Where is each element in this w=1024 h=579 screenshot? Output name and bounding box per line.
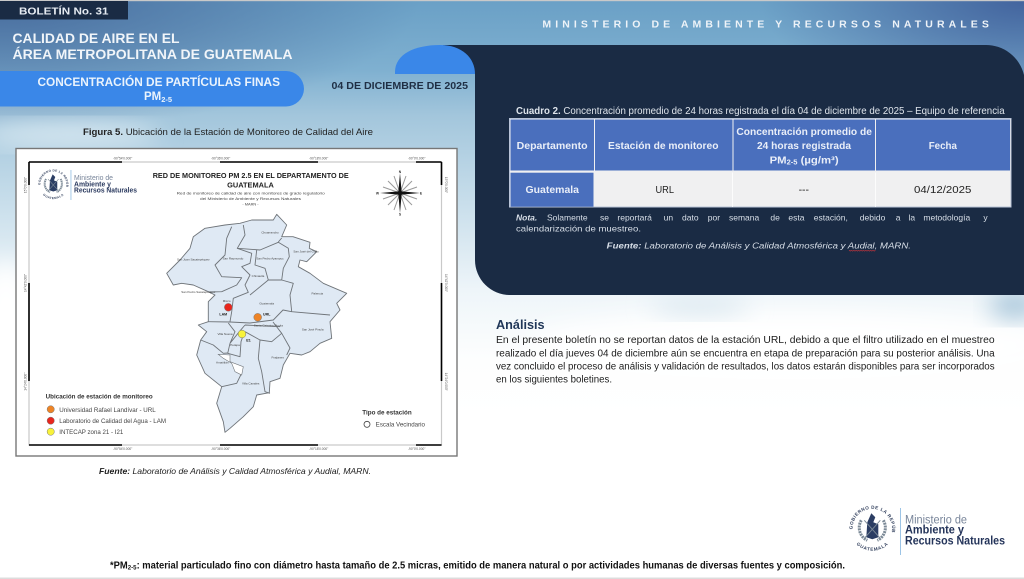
map graticule labels <box>24 156 448 451</box>
map graticule labels: 15°0'0.000" <box>444 177 448 193</box>
table note: dato <box>682 212 699 222</box>
footnote: *PM <box>110 560 129 572</box>
table source: Fuente: Laboratorio de Análisis y Calidad Atmosférica y Audial, MARN. <box>607 240 911 250</box>
map of the department of Guatemala: Guatemala <box>259 301 274 305</box>
map graticule labels: -90°36'0.000" <box>211 447 230 451</box>
map graticule labels: -90°0'0.000" <box>408 447 425 451</box>
icon: compass rose: E <box>420 191 423 195</box>
map of the department of Guatemala: San Juan Sacatepéquez <box>177 257 210 261</box>
analysis text block: en los siguientes boletines. <box>496 374 612 385</box>
table note: a <box>896 212 901 222</box>
table data row: --- <box>799 184 809 196</box>
station marker: I21: I21 <box>246 338 251 342</box>
analysis text block: En el presente boletín no se reportan datos de la estación URL, debido a que el filtro utilizado en el muestreo <box>496 335 995 346</box>
decorative blue dome <box>395 45 475 74</box>
table caption: Cuadro 2. Concentración promedio de 24 horas registrada el día 04 de diciembre de 2025 – Equipo de referencia <box>516 106 1005 117</box>
footnote: : material particulado fino con diámetro hasta tamaño de 2.5 micras, emitido de manera natural o por actividades humanas de diversas fuentes y composición. <box>137 560 845 572</box>
lake Amatitlán <box>218 354 243 375</box>
table note: Solamente <box>547 212 588 222</box>
table header row: Departamento <box>517 140 588 152</box>
legend: station location: Ubicación de estación de monitoreo <box>46 394 153 401</box>
map of the department of Guatemala: Palencia <box>312 291 323 295</box>
legend: station type: Tipo de estación <box>362 409 412 416</box>
map of the department of Guatemala: San Pedro Ayampuc <box>256 256 284 260</box>
icon: ministry logo: Ambiente y <box>905 524 965 536</box>
map title: del Ministerio de Ambiente y Recursos Naturales <box>200 196 301 201</box>
map graticule labels: 14°42'0.000" <box>444 274 448 292</box>
bulletin number tag: BOLETÍN No. 31 <box>19 4 109 18</box>
table note: calendarización de muestreo. <box>516 224 641 234</box>
map graticule labels: -90°54'0.000" <box>113 447 132 451</box>
date: 04 DE DICIEMBRE DE 2025 <box>332 80 468 92</box>
legend: station location: INTECAP zona 21 - I21 <box>59 430 124 436</box>
station marker: URL <box>254 313 271 321</box>
map of the department of Guatemala: Chinautla <box>252 274 265 278</box>
map of the department of Guatemala: San Pedro Sacatepéquez <box>181 290 216 294</box>
footnote: 2-5 <box>128 564 137 572</box>
title: ÁREA METROPOLITANA DE GUATEMALA <box>12 47 293 62</box>
map of the department of Guatemala: Chuarrancho <box>261 230 279 234</box>
legend: station location: Laboratorio de Calidad del Agua - LAM <box>59 419 166 425</box>
icon: ministry logo: Recursos Naturales <box>905 535 1005 547</box>
icon: compass rose: W <box>376 191 380 195</box>
subtitle pill: PM <box>144 91 161 103</box>
map graticule labels: 15°0'0.000" <box>24 177 28 193</box>
analysis text block: realizado el día jueves 04 de diciembre aún se encuentra en etapa de preparación para su posterior análisis. Una <box>496 348 995 359</box>
title: CALIDAD DE AIRE EN EL <box>12 31 180 46</box>
panel: map figure <box>15 148 458 457</box>
icon: compass rose: N <box>399 170 402 174</box>
bulletin number tag <box>0 1 128 20</box>
icon: compass rose <box>376 170 423 216</box>
analysis heading: Análisis <box>496 318 545 332</box>
station marker: LAM <box>219 303 232 316</box>
icon: ministry logo: GUATEMALA <box>857 542 888 551</box>
table data row: Guatemala <box>526 184 579 196</box>
table header row: PM <box>770 154 785 166</box>
panel: navy table panel <box>443 45 1024 295</box>
map of the department of Guatemala: Petapa <box>230 343 240 347</box>
table note: un <box>664 212 673 222</box>
icon: ministry logo <box>849 506 1005 555</box>
map of the department of Guatemala: Mixco <box>223 299 231 303</box>
map of the department of Guatemala <box>167 214 347 432</box>
map graticule labels: -90°36'0.000" <box>211 156 230 160</box>
map graticule labels: 14°42'0.000" <box>24 274 28 292</box>
icon: ministry logo: Ministerio de <box>905 514 967 526</box>
title <box>12 31 293 62</box>
station marker: I21 <box>238 330 251 342</box>
ministry header: MINISTERIO DE AMBIENTE Y RECURSOS NATURALES <box>542 18 989 30</box>
table header row: Concentración promedio de <box>736 126 872 138</box>
icon: map ministry logo: GUATEMALA <box>43 194 64 200</box>
table header row: 2-5 <box>787 160 798 166</box>
table note: reportará <box>617 212 652 222</box>
map source: Fuente: Laboratorio de Análisis y Calidad Atmosférica y Audial, MARN. <box>99 466 371 476</box>
subtitle pill <box>0 71 304 106</box>
icon: map ministry logo: Ambiente y <box>74 182 111 188</box>
table: PM2.5 concentration <box>510 118 1011 207</box>
figure caption: Figura 5. Ubicación de la Estación de Monitoreo de Calidad del Aire <box>83 127 373 138</box>
table note: Nota. <box>516 212 537 222</box>
icon: map ministry logo: Recursos Naturales <box>74 188 137 195</box>
map graticule labels: 14°24'0.000" <box>24 373 28 391</box>
table note: la <box>908 212 915 222</box>
subtitle pill: 2-5 <box>161 95 172 104</box>
table note: por <box>708 212 720 222</box>
map of the department of Guatemala: Fraijanes <box>272 355 284 359</box>
table note: debido <box>860 212 886 222</box>
table data row: URL <box>656 184 674 196</box>
analysis text block <box>496 335 995 385</box>
table note: estación, <box>814 212 848 222</box>
table header row: Estación de monitoreo <box>608 140 718 152</box>
map graticule labels: -90°0'0.000" <box>408 156 425 160</box>
icon: ministry logo: GOBIERNO DE LA REPÚBLICA <box>849 506 896 532</box>
table header row: (µg/m³) <box>797 154 839 166</box>
table header row: 24 horas registrada <box>757 140 851 152</box>
table note: de <box>770 212 780 222</box>
map neatline frame <box>29 162 442 445</box>
legend: station location: Universidad Rafael Landívar - URL <box>59 408 156 414</box>
legend: station type <box>362 409 426 428</box>
map of the department of Guatemala: Villa Canales <box>242 381 260 385</box>
map title: - MARN - <box>242 202 259 206</box>
table note: metodología <box>923 212 970 222</box>
map title <box>153 171 349 206</box>
icon: map ministry logo: Ministerio de <box>74 175 113 182</box>
icon: map ministry logo <box>38 169 137 200</box>
table header row <box>510 120 1010 170</box>
icon: compass rose: S <box>399 212 402 216</box>
station marker: LAM: LAM <box>219 312 227 316</box>
map of the department of Guatemala: San José Pinula <box>302 327 324 331</box>
map of the department of Guatemala: Amatitlán <box>216 361 229 365</box>
map title: Red de monitoreo de calidad de aire con monitores de grado regulatorio <box>177 191 325 196</box>
subtitle pill: CONCENTRACIÓN DE PARTÍCULAS FINAS <box>38 74 280 89</box>
legend: station type: Escala Vecindario <box>376 422 426 428</box>
map title: GUATEMALA <box>227 180 274 190</box>
table note: se <box>600 212 609 222</box>
analysis text block: vez concluido el proceso de análisis y validación de resultados, los datos estarán disponibles para ser incorporados <box>496 361 995 372</box>
table note <box>516 212 988 234</box>
map of the department of Guatemala: San Raymundo <box>223 256 244 260</box>
map of the department of Guatemala: San José del Golfo <box>293 250 319 254</box>
map graticule labels: -90°18'0.000" <box>309 447 328 451</box>
table note: semana <box>729 212 760 222</box>
legend: station location <box>46 394 166 436</box>
table note: esta <box>788 212 805 222</box>
map of the department of Guatemala: Villa Nueva <box>217 332 233 336</box>
icon: map ministry logo: GOBIERNO DE LA REPÚBLICA <box>38 169 69 187</box>
station marker: URL: URL <box>263 313 271 317</box>
map title: RED DE MONITOREO PM 2.5 EN EL DEPARTAMENTO DE <box>153 171 349 180</box>
table data row <box>510 172 972 207</box>
map graticule labels: -90°18'0.000" <box>309 156 328 160</box>
map graticule labels: -90°54'0.000" <box>113 156 132 160</box>
table note: y <box>983 212 988 222</box>
map graticule labels: 14°24'0.000" <box>444 373 448 391</box>
map of the department of Guatemala: Santa Catarina Pinula <box>254 324 283 328</box>
table header row: Fecha <box>929 140 957 152</box>
table data row: 04/12/2025 <box>914 184 972 196</box>
